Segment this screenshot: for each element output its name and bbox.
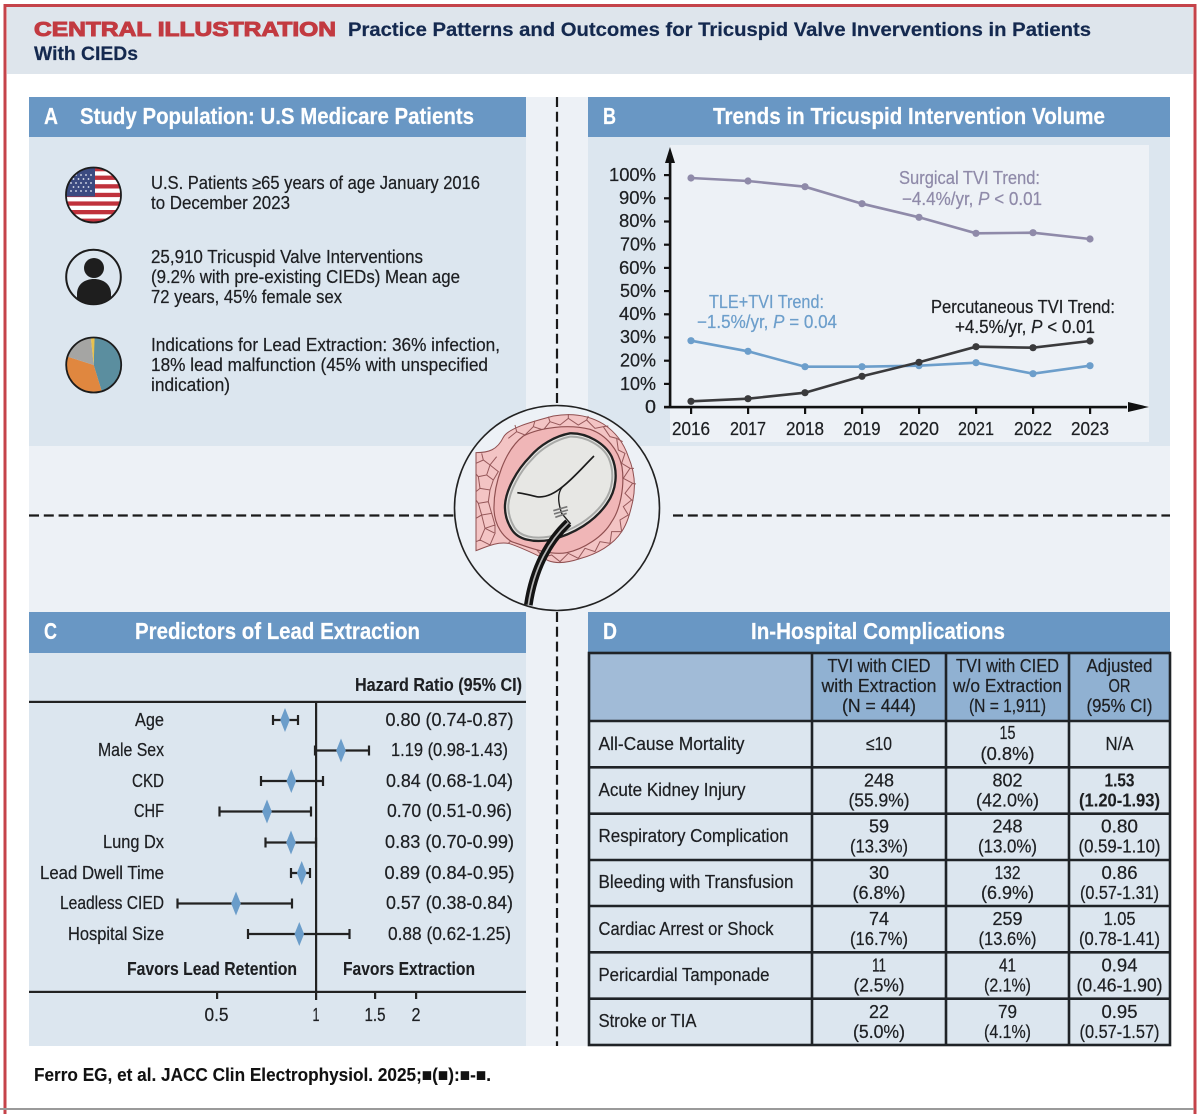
- row: acute kidney injury: 248: [864, 770, 894, 790]
- hazard ratio values: 0.70 (0.51-0.96): [387, 801, 512, 821]
- row labels: Leadless CIED: [60, 893, 164, 913]
- row: respiratory complication: Respiratory Complication: [598, 826, 788, 846]
- row: cardiac arrest or shock: 74: [869, 909, 889, 929]
- row: respiratory complication: 0.80: [1101, 816, 1138, 836]
- panel C heading: Predictors of Lead Extraction: [135, 618, 420, 644]
- lead catheter: [528, 523, 568, 605]
- row: pericardial tamponade: 0.94: [1102, 956, 1138, 976]
- row: respiratory complication: 59: [869, 816, 889, 836]
- table header cells: (N = 444): [842, 696, 916, 716]
- panel B heading: B: [603, 103, 616, 129]
- favors labels: Favors Extraction: [343, 959, 475, 979]
- x axis labels: 2021: [958, 419, 994, 439]
- row: pericardial tamponade: 41: [999, 956, 1016, 976]
- panel A: study population: [29, 97, 526, 446]
- hazard ratio values: 0.57 (0.38-0.84): [386, 893, 513, 913]
- table header cells: TVI with CIED: [828, 656, 930, 676]
- icon: person: [66, 250, 121, 306]
- row: pericardial tamponade: Pericardial Tamponade: [598, 965, 770, 985]
- row: bleeding with transfusion: 0.86: [1102, 863, 1138, 883]
- text: indications: [151, 335, 500, 395]
- row: acute kidney injury: (42.0%): [976, 790, 1039, 810]
- hazard ratio values: 1.19 (0.98-1.43): [391, 740, 508, 760]
- y axis labels: 60%: [619, 258, 656, 278]
- panel D: complications table: [588, 612, 1170, 1045]
- table header cells: [821, 656, 1152, 716]
- table: [589, 653, 1170, 1045]
- annotation: TLE+TVI trend: [697, 292, 837, 332]
- panel A heading: A: [44, 103, 58, 129]
- table header cells: (95% CI): [1086, 696, 1152, 716]
- row: bleeding with transfusion: (6.8%): [852, 883, 906, 903]
- annotation: TLE+TVI trend: −1.5%/yr, P = 0.04: [697, 312, 837, 332]
- y axis labels: 50%: [620, 281, 656, 301]
- text: interventions: (9.2% with pre-existing CIEDs) Mean age: [151, 267, 460, 287]
- text: indications: indication): [151, 375, 230, 395]
- panel C heading: C: [44, 618, 57, 644]
- y axis labels: 0: [645, 397, 656, 417]
- title text: With CIEDs: [34, 43, 138, 65]
- text: patients: [151, 173, 480, 213]
- x axis labels: 2022: [1014, 419, 1052, 439]
- plot axes: [29, 701, 526, 1000]
- icon: pie chart: [66, 338, 121, 392]
- row: bleeding with transfusion: (6.9%): [981, 883, 1034, 903]
- annotation: surgical trend: [899, 168, 1042, 209]
- row: all-cause mortality: [598, 723, 1134, 764]
- annotation: percutaneous trend: Percutaneous TVI Trend:: [931, 297, 1115, 317]
- row: acute kidney injury: Acute Kidney Injury: [598, 780, 746, 800]
- table header cells: TVI with CIED: [956, 656, 1059, 676]
- header band: [7, 7, 1193, 74]
- confidence intervals: [178, 715, 369, 939]
- x axis labels: 2017: [730, 419, 766, 439]
- title label: CENTRAL ILLUSTRATION: [34, 19, 336, 41]
- x axis labels: 2020: [899, 419, 939, 439]
- row: pericardial tamponade: (0.46-1.90): [1076, 976, 1162, 996]
- row: pericardial tamponade: [598, 956, 1162, 996]
- title text: Practice Patterns and Outcomes for Tricuspid Valve Inverventions in Patients: [348, 19, 1091, 41]
- row labels: Lung Dx: [103, 832, 164, 852]
- x axis labels: 2018: [786, 419, 824, 439]
- tissue outer: [476, 415, 634, 563]
- favors labels: [127, 959, 475, 979]
- hazard ratio values: 0.83 (0.70-0.99): [385, 832, 514, 852]
- y axis labels: 30%: [620, 327, 656, 347]
- panel A heading: Study Population: U.S Medicare Patients: [80, 103, 474, 129]
- row: stroke or TIA: (0.57-1.57): [1080, 1022, 1160, 1042]
- row labels: CKD: [132, 771, 164, 791]
- y axis labels: [609, 165, 656, 417]
- citation: Ferro EG, et al. JACC Clin Electrophysiol. 2025;■(■):■-■.: [34, 1065, 491, 1085]
- panel C heading: [44, 618, 420, 644]
- row: acute kidney injury: 1.53: [1104, 770, 1134, 790]
- table grid: [589, 653, 1170, 1045]
- line chart: [609, 147, 1149, 439]
- annotation: surgical trend: Surgical TVI Trend:: [899, 168, 1040, 188]
- table header cells: with Extraction: [821, 676, 936, 696]
- inner muscular ring: [494, 427, 623, 553]
- row: cardiac arrest or shock: Cardiac Arrest or Shock: [598, 919, 774, 939]
- y axis labels: 90%: [619, 188, 656, 208]
- series: TLE+TVI: [687, 337, 1094, 377]
- text: indications: 18% lead malfunction (45% with unspecified: [151, 355, 488, 375]
- annotation: percutaneous trend: +4.5%/yr, P < 0.01: [955, 317, 1095, 337]
- row: stroke or TIA: (5.0%): [853, 1022, 905, 1042]
- favors labels: Favors Lead Retention: [127, 959, 297, 979]
- row: stroke or TIA: 0.95: [1102, 1002, 1138, 1022]
- x axis labels: [672, 419, 1109, 439]
- row: all-cause mortality: N/A: [1106, 734, 1134, 754]
- forest plot: [29, 675, 526, 1025]
- row: all-cause mortality: (0.8%): [980, 744, 1034, 764]
- row labels: Age: [135, 710, 164, 730]
- row: respiratory complication: (13.3%): [850, 836, 908, 856]
- row: pericardial tamponade: 11: [872, 956, 886, 976]
- row labels: CHF: [134, 801, 164, 821]
- y axis labels: 70%: [620, 234, 656, 254]
- row labels: [40, 710, 164, 944]
- row: all-cause mortality: 15: [1000, 723, 1016, 743]
- x axis labels: 2016: [672, 419, 710, 439]
- effect diamonds: [231, 708, 346, 946]
- row: bleeding with transfusion: 30: [869, 863, 889, 883]
- annotation: TLE+TVI trend: TLE+TVI Trend:: [709, 292, 824, 312]
- axis tick labels: 2: [412, 1005, 420, 1025]
- row: stroke or TIA: Stroke or TIA: [598, 1011, 696, 1031]
- row labels: Lead Dwell Time: [40, 863, 164, 883]
- row: pericardial tamponade: (2.5%): [854, 976, 904, 996]
- y axis labels: 40%: [619, 304, 656, 324]
- row: bleeding with transfusion: Bleeding with Transfusion: [598, 872, 794, 892]
- text: patients: to December 2023: [151, 193, 290, 213]
- text: interventions: [151, 247, 460, 307]
- row: cardiac arrest or shock: (0.78-1.41): [1079, 929, 1160, 949]
- row: cardiac arrest or shock: (16.7%): [850, 929, 908, 949]
- table header cells: Adjusted: [1086, 656, 1152, 676]
- row labels: Male Sex: [98, 740, 164, 760]
- title text: [34, 19, 1091, 65]
- text: interventions: 72 years, 45% female sex: [151, 287, 342, 307]
- column heading: Hazard Ratio (95% CI): [355, 675, 522, 695]
- row: pericardial tamponade: (2.1%): [984, 976, 1031, 996]
- row: cardiac arrest or shock: 1.05: [1104, 909, 1136, 929]
- tissue cell network: [476, 414, 636, 562]
- text: indications: Indications for Lead Extraction: 36% infection,: [151, 335, 500, 355]
- y axis labels: 80%: [619, 211, 656, 231]
- axis tick labels: 0.5: [204, 1005, 228, 1025]
- hazard ratio values: 0.80 (0.74-0.87): [386, 710, 514, 730]
- x axis labels: 2023: [1071, 419, 1109, 439]
- valve annulus and leaflets: [505, 433, 616, 541]
- hazard ratio values: 0.84 (0.68-1.04): [386, 771, 513, 791]
- annotation: surgical trend: −4.4%/yr, P < 0.01: [902, 189, 1042, 209]
- row: respiratory complication: (0.59-1.10): [1078, 836, 1160, 856]
- row: acute kidney injury: (55.9%): [848, 790, 910, 810]
- chart axes: [664, 147, 1149, 414]
- row: cardiac arrest or shock: 259: [992, 909, 1022, 929]
- y axis labels: 10%: [620, 374, 656, 394]
- table header cells: OR: [1108, 676, 1131, 696]
- row labels: Hospital Size: [68, 924, 164, 944]
- central illustration: tricuspid valve with lead: [454, 406, 660, 610]
- axis tick labels: [204, 1005, 420, 1025]
- y axis labels: 100%: [609, 165, 656, 185]
- row: respiratory complication: (13.0%): [978, 836, 1037, 856]
- row: acute kidney injury: 802: [992, 770, 1022, 790]
- row: all-cause mortality: ≤10: [866, 734, 892, 754]
- hazard ratio values: [384, 710, 514, 944]
- icon: US flag: [65, 167, 123, 223]
- text: patients: U.S. Patients ≥65 years of age January 2016: [151, 173, 480, 193]
- annotation: percutaneous trend: [931, 297, 1115, 337]
- row: stroke or TIA: 79: [998, 1002, 1017, 1022]
- series: percutaneous TVI: [687, 337, 1094, 405]
- panel B heading: Trends in Tricuspid Intervention Volume: [713, 103, 1105, 129]
- x axis labels: 2019: [844, 419, 880, 439]
- row: bleeding with transfusion: [598, 863, 1159, 903]
- panel D heading: In-Hospital Complications: [751, 618, 1005, 644]
- text: interventions: 25,910 Tricuspid Valve Interventions: [151, 247, 423, 267]
- panel D heading: D: [603, 618, 617, 644]
- panel B: trends: [588, 97, 1170, 446]
- series: surgical TVI: [687, 174, 1094, 243]
- row: stroke or TIA: (4.1%): [984, 1022, 1031, 1042]
- row: acute kidney injury: [598, 770, 1160, 810]
- row: cardiac arrest or shock: (13.6%): [978, 929, 1036, 949]
- row: acute kidney injury: (1.20-1.93): [1079, 790, 1160, 810]
- axis tick labels: 1: [312, 1005, 320, 1025]
- hazard ratio values: 0.89 (0.84-0.95): [384, 863, 514, 883]
- axis tick labels: 1.5: [364, 1005, 386, 1025]
- row: stroke or TIA: 22: [869, 1002, 889, 1022]
- table header cells: (N = 1,911): [969, 696, 1046, 716]
- hazard ratio values: 0.88 (0.62-1.25): [388, 924, 511, 944]
- panel D heading: [603, 618, 1005, 644]
- row: respiratory complication: 248: [992, 816, 1022, 836]
- row: respiratory complication: [598, 816, 1160, 856]
- row: stroke or TIA: [598, 1002, 1160, 1042]
- row: bleeding with transfusion: 132: [994, 863, 1020, 883]
- row: all-cause mortality: All-Cause Mortality: [598, 734, 744, 754]
- table header cells: w/o Extraction: [952, 676, 1062, 696]
- row: bleeding with transfusion: (0.57-1.31): [1080, 883, 1159, 903]
- y axis labels: 20%: [620, 350, 656, 370]
- panel C: predictors: [29, 612, 526, 1046]
- row: cardiac arrest or shock: [598, 909, 1160, 949]
